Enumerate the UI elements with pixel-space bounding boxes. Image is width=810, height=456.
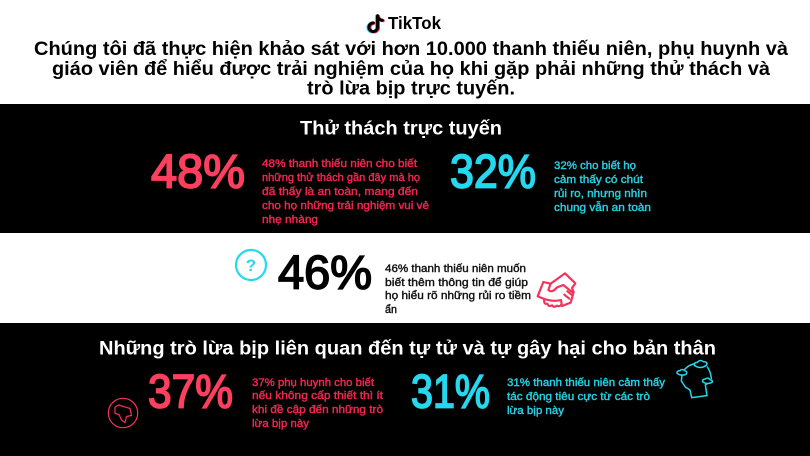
icon: question mark: ? (246, 256, 256, 275)
heading: hoaxes: Những trò lừa bịp liên quan đến tự tử và tự gây hại cho bản thân (99, 338, 716, 360)
stat: 37%: 37% (148, 364, 233, 418)
text: 32% description: rủi ro, nhưng nhìn (554, 188, 647, 200)
icon: handshake (538, 273, 575, 307)
text: 32% description: 32% cho biết họ (554, 160, 636, 172)
stat: 48%: 48% (151, 144, 245, 198)
panel: online challenges background (0, 104, 810, 233)
text: 37% description: nếu không cấp thiết thì ít (252, 390, 383, 402)
text: 32% description (554, 160, 651, 214)
text: 37% description: khi đề cập đến những trò (252, 404, 383, 416)
panel: header background (0, 0, 810, 104)
icon: TikTok note (368, 16, 383, 32)
stat: 31%: 31% (411, 364, 490, 418)
text: 46% description: 46% thanh thiếu niên muốn (385, 263, 526, 275)
stat: 32%: 32% (450, 144, 536, 198)
text: 48% description: những thử thách gần đây mà họ (262, 172, 420, 184)
text: 46% description: ẩn (385, 304, 397, 316)
title: trò lừa bịp trực tuyến. (307, 78, 515, 100)
icon: head with clouds (677, 360, 712, 398)
title: Chúng tôi đã thực hiện khảo sát với hơn 10.000 thanh thiếu niên, phụ huynh và (34, 39, 788, 60)
text: 32% description: cảm thấy có chút (554, 174, 643, 186)
logo: TikTok (368, 13, 441, 33)
text: 46% description (385, 263, 531, 316)
title: giáo viên để hiểu được trải nghiệm của họ khi gặp phải những thử thách và (52, 59, 770, 80)
logo wordmark: TikTok (388, 13, 441, 33)
heading: online challenges: Thử thách trực tuyến (300, 118, 502, 140)
text: 48% description: đã thấy là an toàn, mang đến (262, 186, 418, 198)
text: 32% description: chung vẫn an toàn (554, 201, 651, 214)
stat: 46%: 46% (278, 246, 372, 298)
title (34, 39, 788, 100)
text: 37% description (252, 377, 383, 430)
text: 48% description: cho họ những trải nghiệm vui vẻ (262, 200, 429, 212)
text: 31% description: tác động tiêu cực từ các trò (507, 391, 650, 403)
text: 37% description: lừa bịp này (252, 418, 310, 430)
text: 48% description: 48% thanh thiếu niên cho biết (262, 158, 417, 170)
icon: thumbs down (108, 398, 138, 428)
text: 48% description (262, 158, 429, 226)
text: 48% description: nhẹ nhàng (262, 214, 318, 226)
text: 31% description (507, 377, 666, 417)
icon: question mark (236, 250, 266, 280)
text: 37% description: 37% phụ huynh cho biết (252, 377, 374, 389)
text: 46% description: biết thêm thông tin để giúp (385, 277, 528, 289)
text: 46% description: họ hiểu rõ những rủi ro tiềm (385, 290, 531, 302)
text: 31% description: lừa bịp này (507, 405, 565, 417)
text: 31% description: 31% thanh thiếu niên cảm thấy (507, 377, 666, 389)
panel: 46% band background (0, 233, 810, 323)
panel: hoaxes background (0, 323, 810, 456)
